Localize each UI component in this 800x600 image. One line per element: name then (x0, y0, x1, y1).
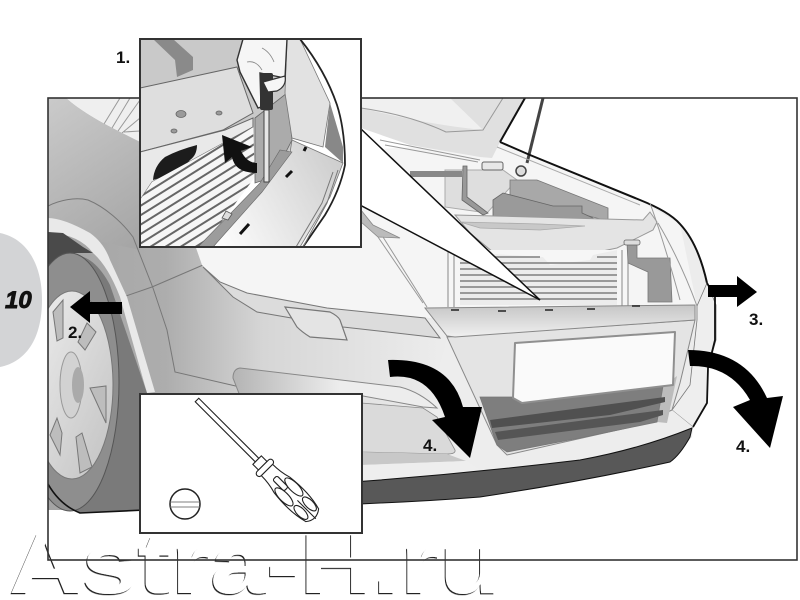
inset 1: detail of screwdriver prying clip (140, 39, 361, 247)
dark strap (153, 39, 193, 77)
tyre sidewall (21, 253, 119, 511)
windshield area (68, 98, 139, 142)
bright wing panel (195, 142, 697, 318)
hub cap (72, 367, 84, 403)
outer rim curve (300, 39, 345, 247)
licence plate (513, 332, 675, 403)
engine bay (361, 147, 697, 307)
black opening (153, 145, 197, 180)
arrow 4 curved right (688, 350, 783, 448)
grey strip (198, 150, 292, 247)
lower grille (480, 376, 677, 452)
cross member (454, 211, 658, 250)
gripping finger (263, 76, 285, 92)
side tab with chapter number (0, 233, 42, 367)
screwdriver shaft (264, 110, 269, 182)
coolant pipe (627, 243, 672, 302)
car body and bumper base (48, 98, 716, 510)
arrow 4 curved left (388, 360, 482, 458)
step labels (68, 48, 763, 456)
label 4 left: 4. (423, 436, 437, 455)
label 4 right: 4. (736, 437, 750, 456)
fog lamp housing (361, 403, 455, 454)
reservoir bar (410, 171, 462, 177)
dark inner arch (48, 232, 93, 265)
right bumper corner (672, 283, 716, 427)
callout wedge to inset (360, 128, 540, 300)
dark lower lip (340, 428, 692, 505)
mounting holes (171, 110, 222, 133)
washer cover (285, 307, 347, 340)
slit marks on upper bar (451, 306, 640, 311)
main car illustration (21, 98, 716, 513)
wheel rim (31, 291, 113, 479)
radiator (448, 250, 628, 307)
battery step (493, 193, 593, 220)
top-right panel (285, 39, 330, 147)
hand crease (247, 48, 274, 70)
inset back panel (140, 39, 292, 200)
gloved hand (237, 39, 287, 108)
wheel arch trim (48, 218, 155, 393)
panel edge strip (203, 267, 440, 338)
screwdriver handle (260, 73, 273, 110)
lower trim lines (296, 170, 338, 247)
dark band (325, 103, 343, 163)
bumper front surface (672, 410, 693, 428)
fog lamp upper cover (233, 368, 437, 408)
label 1: 1. (116, 48, 130, 67)
fender top outline (500, 142, 707, 283)
inset 2: screwdriver tool (140, 391, 362, 533)
channel (255, 93, 292, 183)
illustration frame (48, 98, 797, 560)
inset 1 border (140, 39, 361, 247)
bright floor panel (213, 140, 343, 247)
upper front wing (48, 98, 139, 228)
lamp lower band (361, 452, 466, 465)
pipe cap (624, 240, 640, 245)
slam panel (140, 67, 253, 152)
clip slits (240, 147, 306, 234)
label 3: 3. (749, 310, 763, 329)
left headlamp recess (361, 210, 400, 238)
washer reservoir (445, 170, 517, 213)
clip tab (222, 211, 232, 220)
label 2: 2. (68, 323, 82, 342)
rim spokes (50, 300, 106, 473)
bonnet strut (516, 98, 543, 176)
battery box (510, 180, 608, 221)
tyre (48, 255, 150, 513)
tyre bottom edge (48, 484, 145, 513)
reservoir cap (482, 162, 503, 170)
wheel hub (60, 352, 82, 418)
arrow 2 pointing left (70, 291, 122, 323)
upper grille bar (425, 305, 695, 337)
radiator fins (140, 127, 255, 247)
right bumper black outline (693, 283, 715, 427)
arrow 3 pointing right (708, 276, 757, 307)
cross member details (460, 222, 585, 230)
icon: slotted screw head (170, 489, 200, 519)
wing crease lines (48, 199, 240, 387)
lower light band (363, 461, 462, 480)
lower face (140, 118, 253, 200)
front wheel and arch (48, 218, 155, 514)
inset curved arrow (222, 135, 257, 173)
hose (462, 166, 488, 215)
open bonnet underside (361, 98, 525, 162)
chapter number 10: 10 (5, 287, 32, 314)
centre panel (447, 320, 695, 455)
fender inner lines (650, 203, 697, 306)
icon: screwdriver (188, 391, 324, 527)
